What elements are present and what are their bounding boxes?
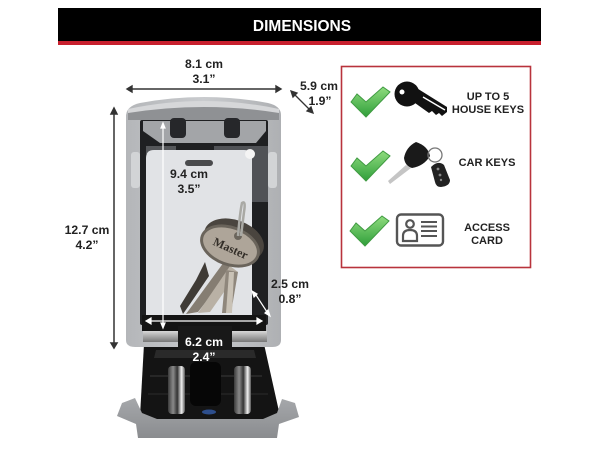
housing bbox=[126, 97, 281, 347]
panel: compatible contents bbox=[342, 66, 530, 268]
label: car keys: CAR KEYS bbox=[459, 157, 515, 169]
dimension: depth: 5.9 cm bbox=[300, 79, 338, 93]
open lid bbox=[117, 344, 299, 438]
dimension: inner depth bbox=[252, 277, 309, 316]
lock box photo bbox=[117, 97, 299, 438]
dimension: inner width: 6.2 cm bbox=[185, 335, 223, 349]
label: house keys bbox=[452, 91, 524, 116]
heading: DIMENSIONS bbox=[253, 18, 351, 35]
icon: check 1 bbox=[351, 87, 390, 117]
dimension: inner height: 3.5” bbox=[177, 182, 201, 196]
dimension: inner height bbox=[161, 123, 208, 328]
latch posts bbox=[168, 366, 185, 414]
key brand text: Master bbox=[211, 234, 251, 262]
dimension: inner depth: 0.8” bbox=[278, 292, 302, 306]
bottom ledge bbox=[142, 315, 266, 331]
dimension: height: 12.7 cm bbox=[65, 223, 110, 237]
label: house keys: HOUSE KEYS bbox=[452, 104, 524, 116]
icon: access card bbox=[397, 214, 443, 246]
dimension: height bbox=[65, 108, 117, 348]
label: access card: ACCESS bbox=[464, 222, 510, 234]
icon: check 2 bbox=[351, 151, 390, 181]
side grips bbox=[131, 152, 140, 188]
dimension: depth bbox=[291, 79, 338, 113]
access card bbox=[146, 150, 252, 315]
interior bbox=[140, 120, 268, 325]
icon: house key bbox=[394, 82, 447, 116]
dimension: inner height: 9.4 cm bbox=[170, 167, 208, 181]
dimension: inner width: 2.4” bbox=[192, 350, 216, 364]
arrow: inner height bbox=[161, 123, 165, 328]
icon: check 3 bbox=[350, 216, 389, 246]
label: access card: CARD bbox=[471, 235, 503, 247]
dimension: height: 4.2” bbox=[75, 238, 99, 252]
dimension: depth: 1.9” bbox=[308, 94, 332, 108]
arrow: inner depth bbox=[252, 291, 270, 316]
dimension: width: 8.1 cm bbox=[185, 57, 223, 71]
arrow: depth bbox=[291, 91, 313, 113]
silver lid front bbox=[117, 398, 299, 438]
arrow: inner width bbox=[146, 318, 262, 324]
dimension: width bbox=[127, 57, 281, 92]
dimension: inner width bbox=[146, 318, 262, 364]
keys bbox=[180, 202, 270, 314]
icon: car key bbox=[388, 142, 450, 187]
arrow: height bbox=[111, 108, 117, 348]
label: house keys: UP TO 5 bbox=[467, 91, 509, 103]
title banner bbox=[58, 8, 541, 45]
arrow: width bbox=[127, 86, 281, 92]
label: access card bbox=[464, 222, 510, 247]
dimension: inner depth: 2.5 cm bbox=[271, 277, 309, 291]
dimension: width: 3.1” bbox=[192, 72, 216, 86]
